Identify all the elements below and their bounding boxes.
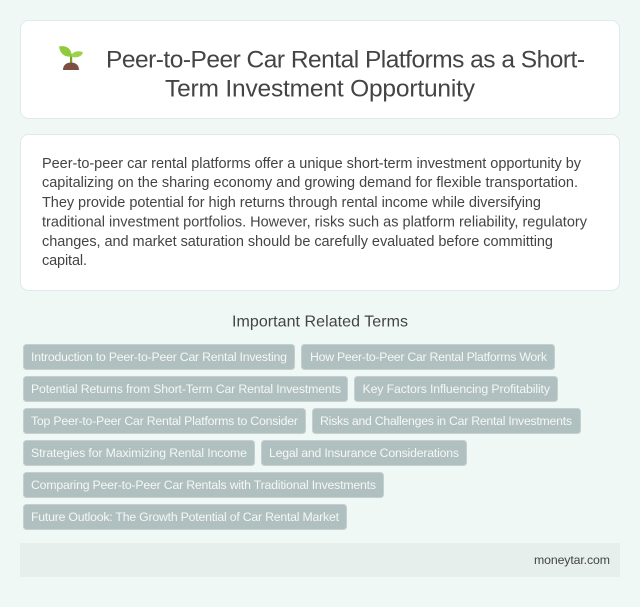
tag: strategies: Strategies for Maximizing Rental Income: [31, 446, 247, 460]
tag: potential returns: Potential Returns from Short-Term Car Rental Investments: [31, 382, 341, 396]
summary text: capitalizing on the sharing economy and growing demand for flexible transportation.: [42, 175, 578, 191]
tag: risks and challenges: [312, 408, 580, 434]
tag: potential returns: [24, 376, 348, 402]
summary text: capital.: [42, 253, 87, 269]
summary text: traditional investment portfolios. However, risks such as platform reliability, regulatory: [42, 214, 588, 230]
tag: legal and insurance: Legal and Insurance Considerations: [269, 446, 459, 460]
summary text: [42, 156, 588, 269]
tag: top platforms: [24, 408, 306, 434]
tag: how platforms work: How Peer-to-Peer Car Rental Platforms Work: [310, 350, 548, 364]
icon: sprout: [59, 46, 83, 70]
summary text: changes, and market saturation should be carefully evaluated before committing: [42, 234, 553, 250]
term tags: [24, 344, 580, 530]
tag: comparing: Comparing Peer-to-Peer Car Rentals with Traditional Investments: [31, 478, 376, 492]
tag: key factors: Key Factors Influencing Profitability: [362, 382, 551, 396]
heading: important related terms: Important Related Terms: [232, 314, 408, 330]
summary text: Peer-to-peer car rental platforms offer a unique short-term investment opportunity by: [42, 156, 582, 172]
title: Peer-to-Peer Car Rental Platforms as a Short-: [106, 46, 585, 74]
tag: legal and insurance: [262, 440, 466, 466]
tag: key factors: [354, 376, 558, 402]
footer source: moneytar.com: [534, 553, 610, 567]
tag: comparing: [24, 472, 384, 498]
tag: top platforms: Top Peer-to-Peer Car Rental Platforms to Consider: [31, 414, 298, 428]
panel: summary: [20, 134, 620, 290]
tag: future outlook: [24, 504, 346, 530]
tag: introduction: Introduction to Peer-to-Peer Car Rental Investing: [31, 350, 287, 364]
header panel: [20, 20, 620, 118]
tag: how platforms work: [302, 344, 554, 370]
tag: risks and challenges: Risks and Challenges in Car Rental Investments: [320, 414, 572, 428]
summary text: They provide potential for high returns through rental income while diversifying: [42, 195, 541, 211]
title: Term Investment Opportunity: [165, 76, 476, 102]
tag: future outlook: Future Outlook: The Growth Potential of Car Rental Market: [31, 510, 340, 524]
tag: introduction: [24, 344, 294, 370]
tag: strategies: [24, 440, 254, 466]
title: [106, 46, 585, 102]
footer: [20, 543, 620, 577]
